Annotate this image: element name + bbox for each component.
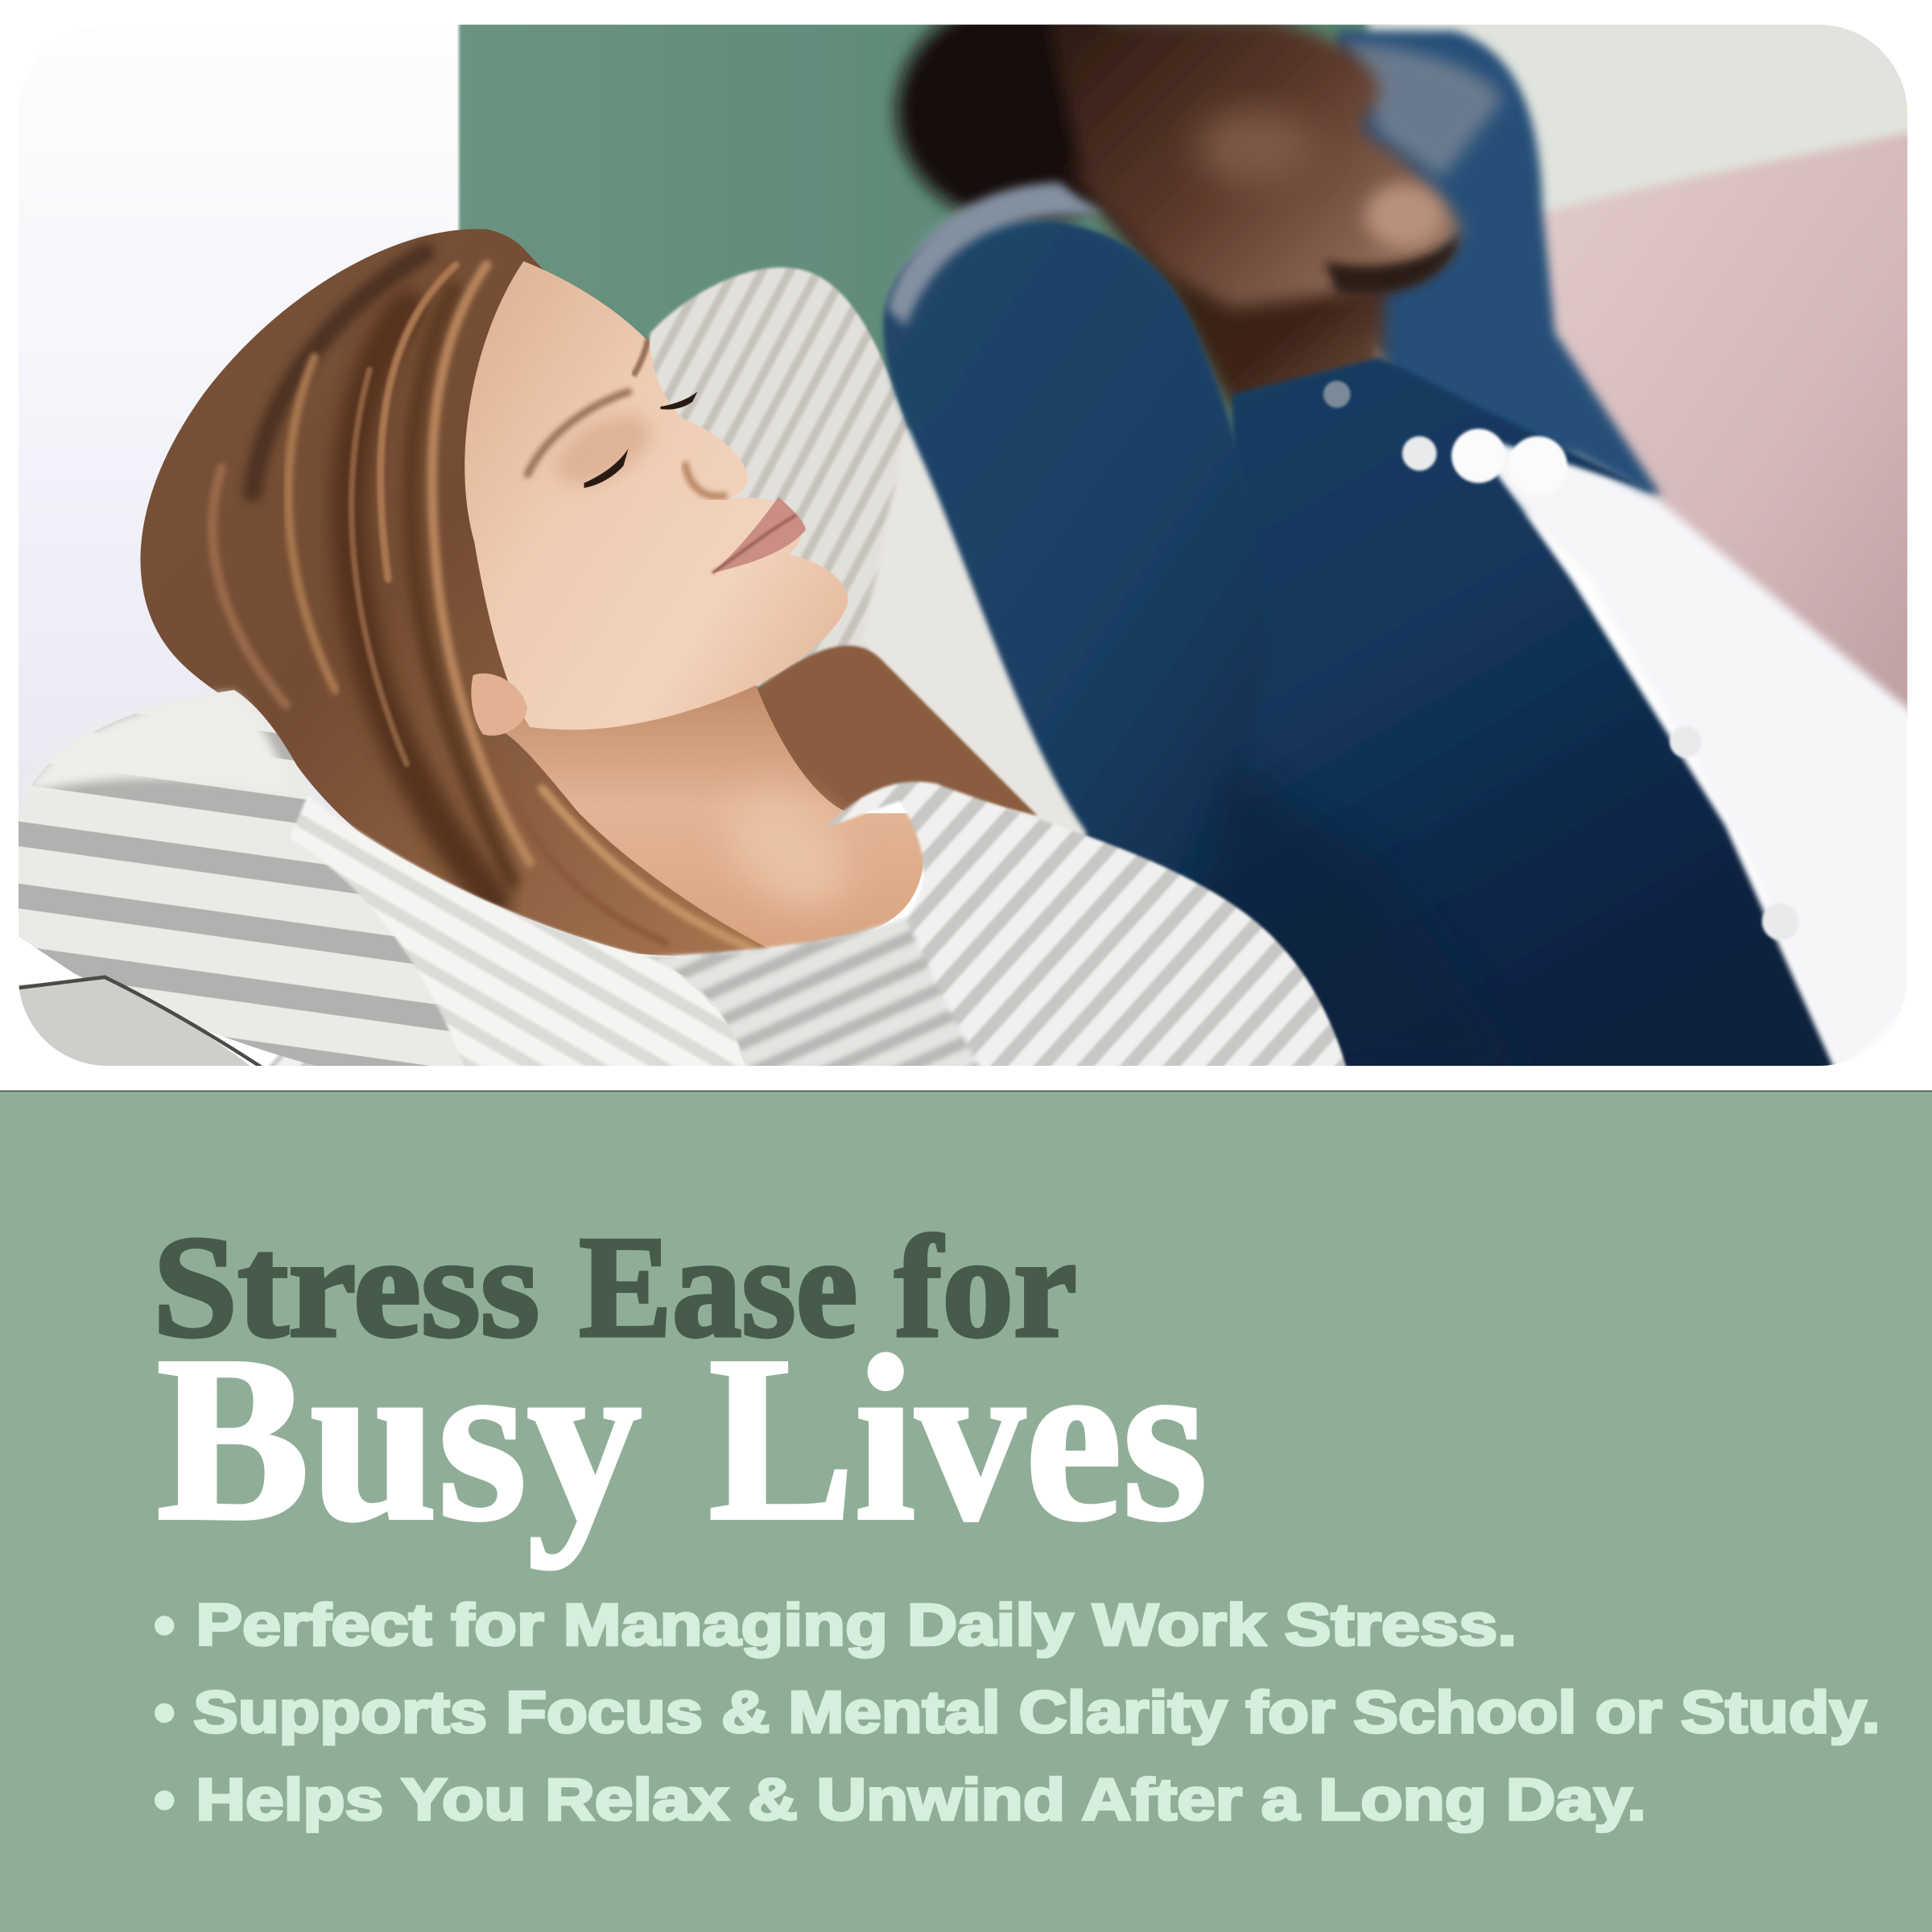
beard	[1324, 234, 1460, 295]
face	[464, 261, 848, 730]
shirt chest	[258, 782, 1349, 1078]
eyebrow	[527, 392, 629, 474]
title line two	[156, 1307, 1208, 1570]
raised arm behind head	[1337, 31, 1661, 518]
panel: green text panel	[0, 1091, 1932, 1932]
eye socket shading	[545, 400, 663, 499]
woman	[19, 229, 1349, 1078]
hair dark and light strands	[213, 253, 752, 949]
neck and chest	[493, 680, 926, 964]
denim sleeve	[884, 219, 1266, 912]
near arm sleeve	[19, 690, 752, 1078]
hair	[140, 229, 774, 956]
background: pale wall	[6, 12, 457, 875]
neck highlight	[707, 770, 870, 930]
neckline stripes	[616, 918, 985, 1078]
panel: photo of relaxing couple	[6, 0, 1922, 1078]
bullet one: •	[154, 1591, 175, 1657]
pink cushion	[1528, 130, 1922, 727]
shirt buttons	[1323, 381, 1799, 940]
sleeve highlight	[23, 692, 290, 795]
mouth line	[712, 515, 796, 573]
hair	[885, 24, 1117, 225]
couch at lower left	[6, 980, 265, 1078]
inner sleeve lining	[1343, 43, 1503, 179]
face	[1047, 19, 1460, 308]
title line one: Ease	[579, 1207, 857, 1368]
denim shirt body	[1084, 357, 1839, 1078]
sleeve fine stripes along forearm	[290, 795, 752, 1078]
far closed eye	[660, 392, 697, 410]
cheek highlight	[1198, 111, 1316, 185]
lips	[712, 497, 806, 573]
title line one	[153, 1207, 1077, 1368]
chin highlight	[1365, 184, 1444, 248]
bullet list	[154, 1591, 1880, 1833]
bullet three text: Helps You Relax & Unwind After a Long Day.	[196, 1766, 1646, 1833]
ear	[471, 674, 527, 736]
neck	[1059, 160, 1386, 413]
couch seam	[6, 977, 261, 1067]
title line one: for	[894, 1207, 1077, 1368]
cream cushion beside arm	[865, 427, 1087, 836]
title line two: Busy	[156, 1307, 642, 1570]
white undershirt	[1442, 431, 1922, 1078]
bullet three: •	[154, 1766, 175, 1833]
closed eye	[584, 448, 629, 488]
title line two: Lives	[708, 1307, 1208, 1570]
man (out of focus)	[884, 0, 1922, 1078]
hair behind neck	[739, 646, 1038, 850]
background: green curtain	[458, 12, 1395, 752]
nose shadow	[685, 462, 727, 497]
title line one: Stress	[153, 1207, 539, 1368]
collar stripe	[887, 183, 1103, 327]
far eyebrow	[634, 339, 648, 376]
thin panel top rule	[0, 1091, 1932, 1092]
bullet one text: Perfect for Managing Daily Work Stress.	[196, 1591, 1517, 1657]
bullet two text: Supports Focus & Mental Clarity for School or Study.	[193, 1678, 1880, 1745]
bullet two: •	[154, 1678, 175, 1745]
background: pale wall at right	[1360, 24, 1908, 362]
woman's far arm in striped sleeve	[647, 266, 910, 687]
chest shadow	[1146, 764, 1528, 1072]
